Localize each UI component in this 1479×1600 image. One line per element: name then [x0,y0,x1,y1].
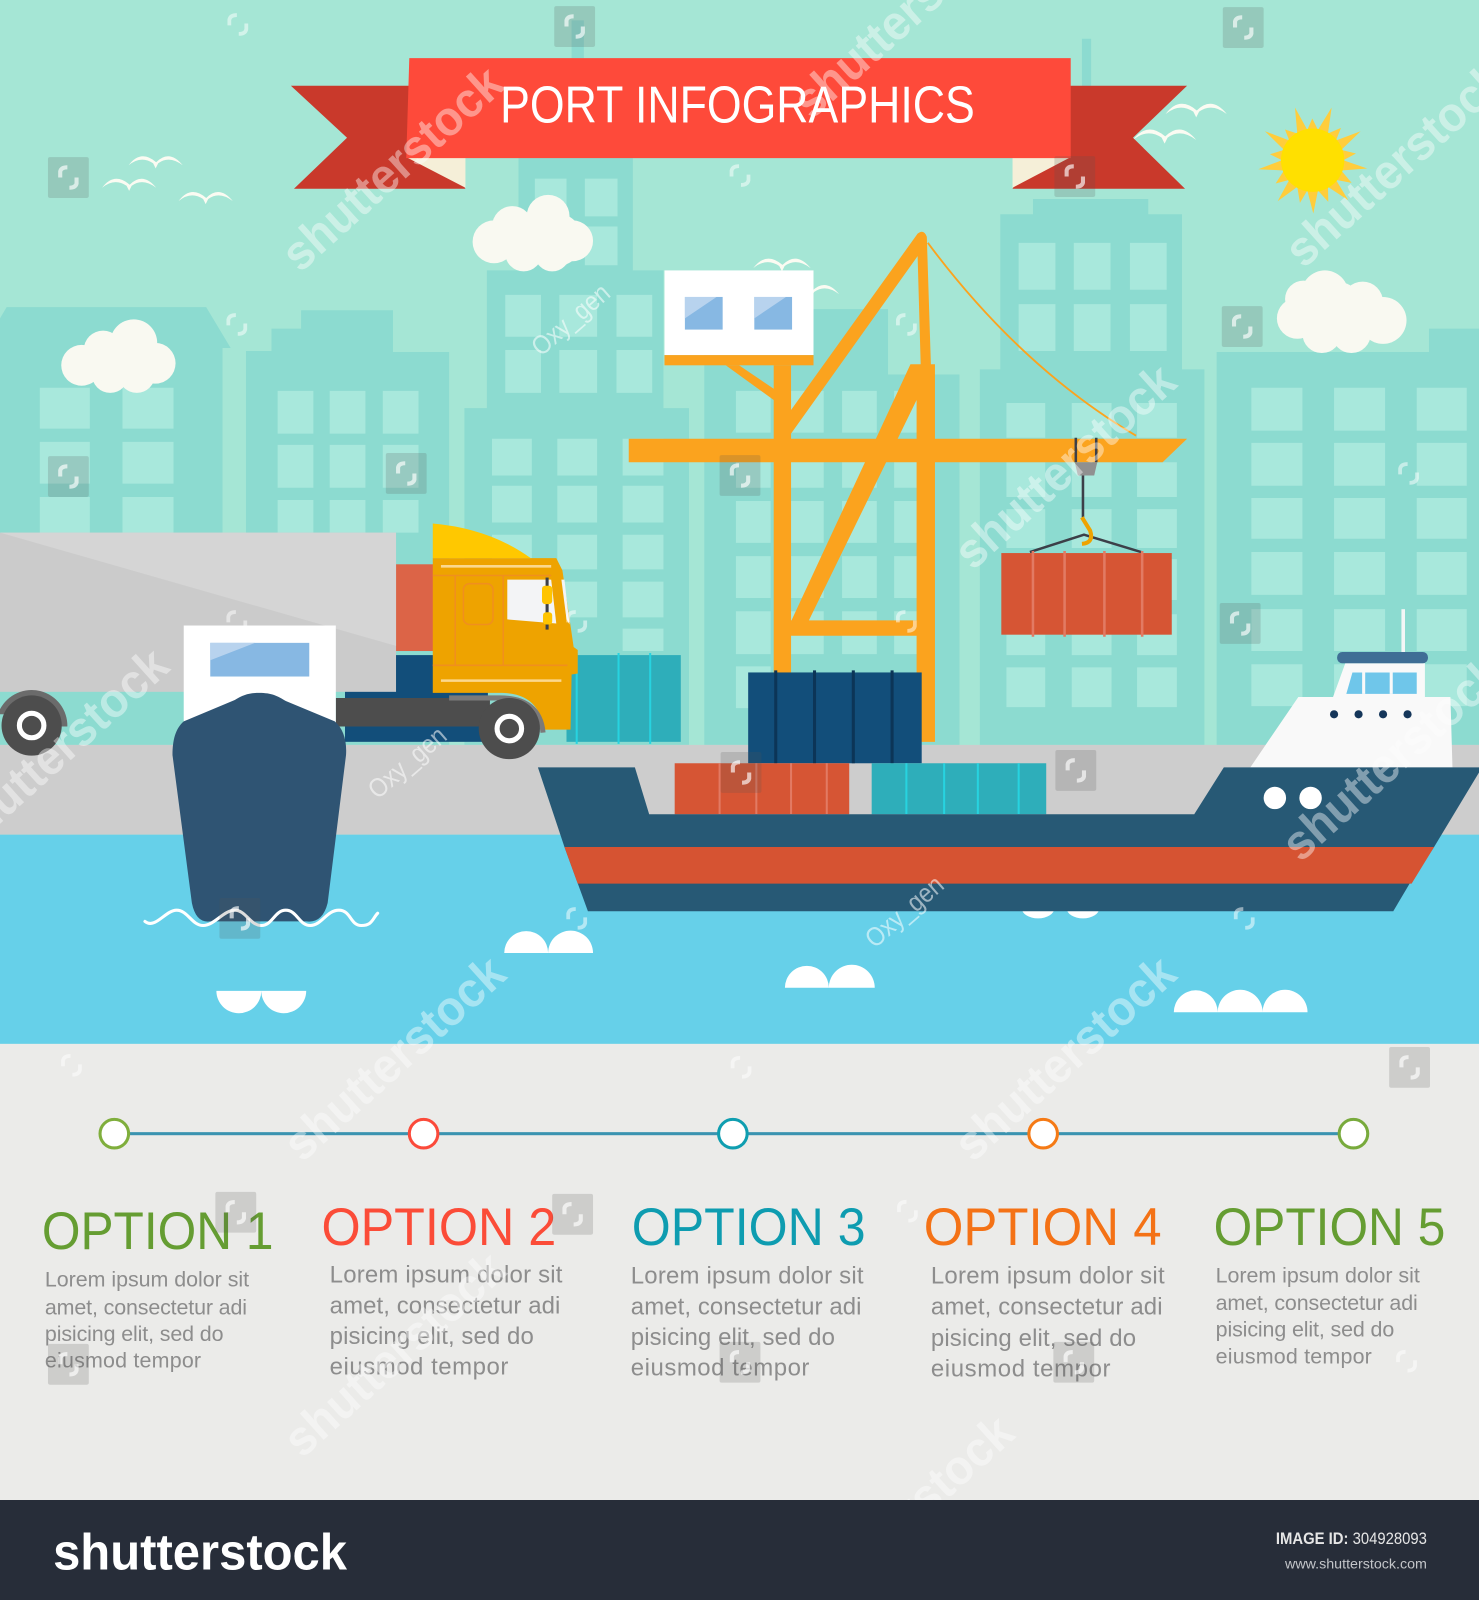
timeline [100,1119,1368,1148]
option 2: eiusmod tempor [330,1353,508,1380]
title banner [291,58,1187,189]
crane [629,232,1187,742]
option 1: pisicing elit, sed do [45,1322,224,1346]
option 5: OPTION 5 [1214,1198,1445,1257]
option 5 [1214,1198,1445,1368]
front ship white cabin [184,626,336,738]
front ship navy bow [172,693,346,922]
stock watermarks: shutterstock [273,945,516,1171]
stock watermarks: shutterstock [273,1241,516,1467]
option 2: OPTION 2 [322,1198,556,1257]
footer url: www.shutterstock.com [1284,1556,1427,1572]
ship teal container [872,763,1046,814]
footer bar [0,1500,1479,1600]
title: PORT INFOGRAPHICS [500,76,975,134]
timeline node 5 [1339,1119,1368,1148]
crane legs and struts [726,232,935,742]
banner right tail [1013,86,1187,189]
option 2: amet, consectetur adi [330,1292,560,1319]
option 5: Lorem ipsum dolor sit [1216,1264,1420,1288]
option 3: pisicing elit, sed do [631,1324,835,1351]
option 1 [42,1202,274,1372]
contributor watermarks: Oxy_gen [859,869,950,954]
icon: birds top right [1133,104,1227,144]
stock watermarks: shutterstock [944,945,1187,1171]
option 1: amet, consectetur adi [45,1295,247,1319]
option 4: OPTION 4 [924,1198,1162,1257]
truck chassis [336,698,490,727]
footer image id: IMAGE ID: 304928093 [1276,1530,1427,1548]
waves [145,910,378,926]
option 2 [322,1198,569,1380]
ship red container [675,763,849,814]
option 3 [631,1198,870,1382]
icon: sun [1258,108,1367,214]
quay ground [0,745,1479,835]
option 4: pisicing elit, sed do [931,1325,1136,1352]
ship portholes [1264,787,1322,809]
option 3: amet, consectetur adi [631,1293,861,1320]
front ship cabin window [210,643,309,677]
small white waves [216,908,1308,1013]
banner right fold [1013,157,1071,188]
option 5: pisicing elit, sed do [1216,1318,1394,1342]
water [0,835,1479,1044]
option 4: eiusmod tempor [931,1356,1111,1383]
crane cabin [664,270,814,365]
navy container behind truck [345,655,488,742]
lower options panel background [0,1044,1479,1500]
banner left tail [291,86,465,189]
truck fender [449,698,543,733]
ship hull [538,767,1479,911]
option 2: Lorem ipsum dolor sit [330,1262,563,1289]
truck front wheel [479,698,540,759]
ship superstructure [1250,609,1452,767]
timeline node 2 [409,1119,438,1148]
truck rear wheel [0,690,67,756]
banner left fold [406,157,465,188]
option 2: pisicing elit, sed do [330,1323,534,1350]
icon: birds behind crane [753,259,839,297]
timeline node 3 [719,1119,747,1148]
icon: cloud near top center [473,195,593,271]
city skyline [0,20,1479,745]
stock watermarks: shutterstock [271,55,514,282]
option 1: OPTION 1 [42,1202,274,1261]
option 4 [924,1198,1172,1383]
crane hook [1030,438,1141,552]
ship red stripe [564,847,1434,884]
option 3: Lorem ipsum dolor sit [631,1263,864,1290]
contributor watermarks [362,277,950,954]
footer logo: shutterstock [53,1523,348,1580]
stock watermarks: shutterstock [944,353,1187,580]
truck trailer [0,533,396,692]
option 5: amet, consectetur adi [1216,1291,1418,1315]
option 4: amet, consectetur adi [931,1293,1163,1320]
red container behind truck [396,564,437,651]
truck [0,523,578,759]
front-view ship [145,626,378,926]
crane cable [928,243,1136,436]
teal containers behind truck [566,653,681,744]
truck cab [433,523,578,730]
cargo ship [538,609,1479,911]
icon: cloud left [61,319,176,393]
option 3: eiusmod tempor [631,1355,809,1382]
option 4: Lorem ipsum dolor sit [931,1263,1165,1290]
navy container on ship [748,670,922,763]
option 3: OPTION 3 [632,1198,866,1257]
contributor watermarks: Oxy_gen [525,277,616,362]
timeline node 4 [1029,1119,1057,1148]
icon: birds top left [102,156,233,204]
contributor watermarks: Oxy_gen [362,720,452,805]
banner ribbon [406,58,1071,158]
option 5: eiusmod tempor [1216,1344,1372,1368]
hanging red container [1001,551,1172,637]
option 1: eiusmod tempor [45,1348,201,1372]
icon: cloud right [1277,270,1407,353]
timeline node 1 [100,1119,129,1148]
crane boom [629,439,1187,462]
option 1: Lorem ipsum dolor sit [45,1268,249,1292]
